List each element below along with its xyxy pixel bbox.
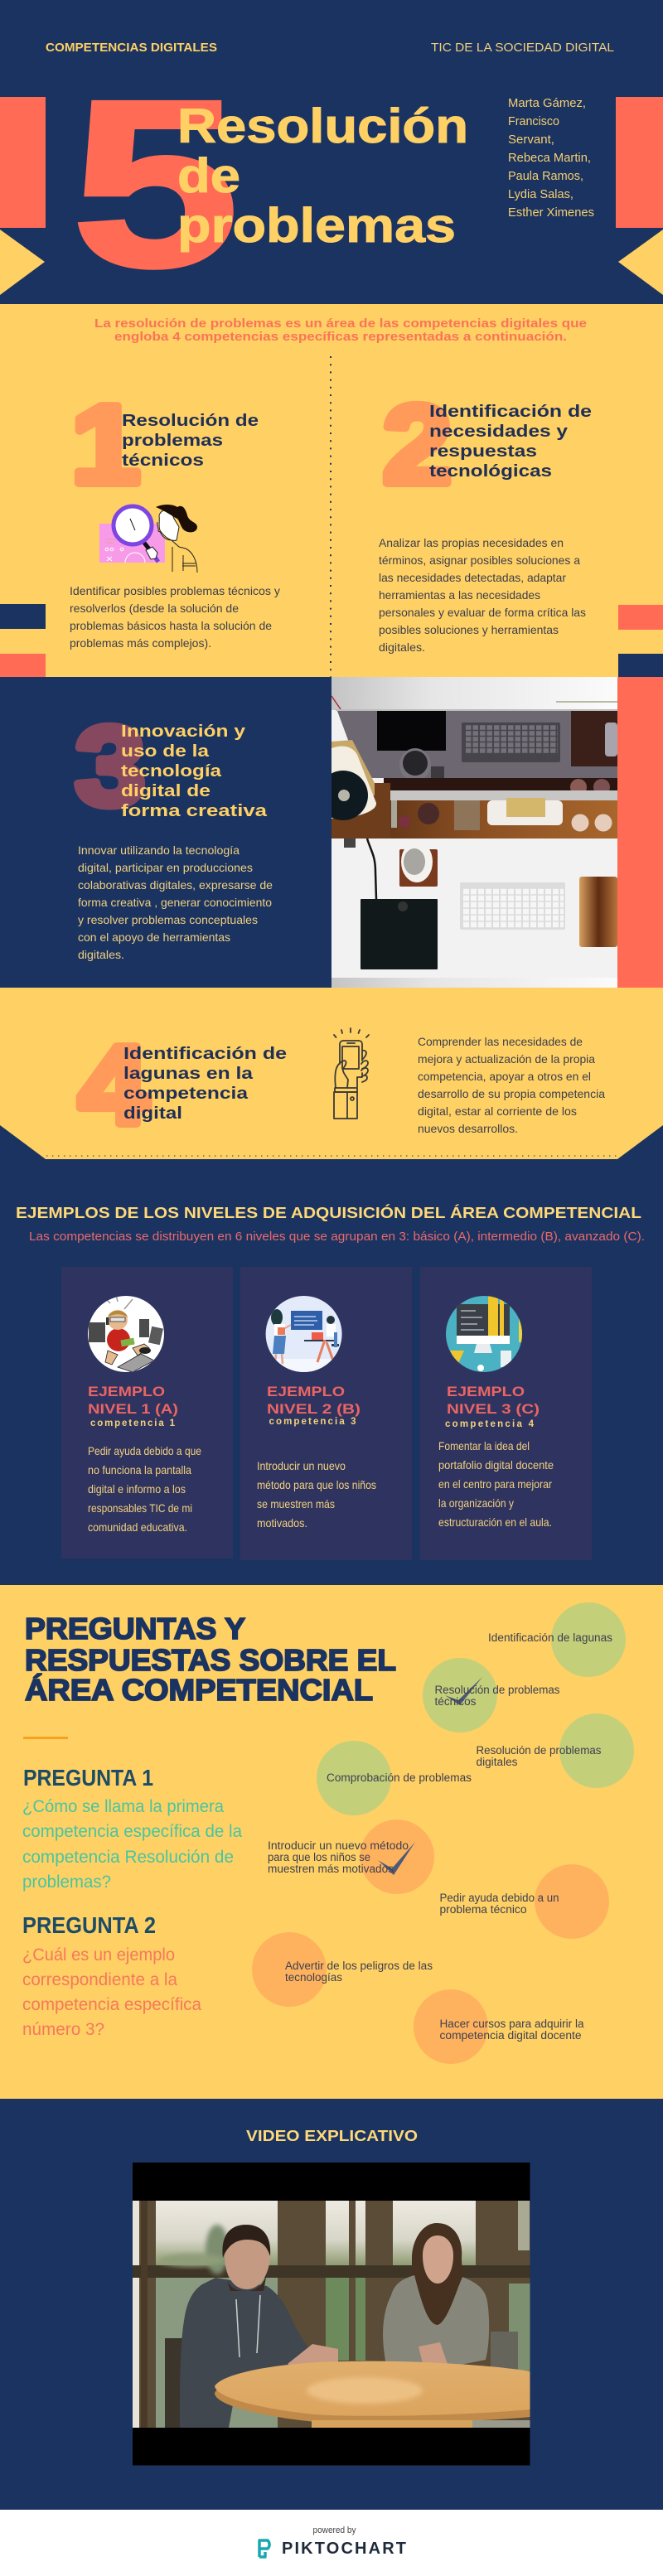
image: digital portfolio bbox=[446, 1296, 523, 1372]
description 3: y resolver problemas conceptuales bbox=[78, 913, 258, 926]
description 1: Identificar posibles problemas técnicos y bbox=[70, 584, 280, 597]
left coral block bbox=[0, 97, 46, 228]
description 2: personales y evaluar de forma crítica las bbox=[379, 606, 586, 619]
orange accent line bbox=[23, 1737, 68, 1739]
question 2 text: ¿Cuál es un ejemplo bbox=[22, 1945, 175, 1965]
authors: Rebeca Martin, bbox=[508, 151, 591, 165]
panel background bbox=[0, 1585, 663, 2099]
levels subtitle: Las competencias se distribuyen en 6 niveles que se agrupan en 3: básico (A), intermedio (B), avanzado (C). bbox=[29, 1230, 645, 1244]
question 1 text: competencia Resolución de bbox=[22, 1848, 234, 1867]
heading 2: tecnológicas bbox=[429, 462, 552, 481]
question 1 text: problemas? bbox=[22, 1873, 111, 1892]
logo wordmark: PIKTOCHART bbox=[282, 2540, 406, 2558]
questions panel bbox=[0, 1585, 663, 2099]
video frame bbox=[133, 2163, 530, 2466]
heading 2: necesidades y bbox=[429, 422, 569, 441]
yellow section background bbox=[0, 304, 663, 677]
description 4: mejora y actualización de la propia bbox=[418, 1052, 595, 1066]
powered by: powered by bbox=[313, 2525, 356, 2535]
answer: cursos bbox=[439, 2018, 584, 2042]
description 4: nuevos desarrollos. bbox=[418, 1122, 518, 1135]
answer: pedir ayuda: problema técnico bbox=[439, 1903, 527, 1916]
description 1 bbox=[70, 584, 280, 650]
question 1 text: competencia específica de la bbox=[22, 1822, 242, 1841]
header right label: TIC DE LA SOCIEDAD DIGITAL bbox=[431, 41, 614, 55]
left yellow arrow bbox=[0, 230, 45, 295]
questions heading: ÁREA COMPETENCIAL bbox=[25, 1673, 373, 1707]
answer: nuevo método: para que los niños se bbox=[268, 1851, 370, 1863]
intro text bbox=[94, 317, 587, 344]
description 2: las necesidades detectadas, adaptar bbox=[379, 571, 566, 584]
heading 3: tecnología bbox=[121, 761, 222, 781]
icon: hand holding phone bbox=[334, 1028, 369, 1119]
number 3: 3 bbox=[75, 703, 145, 829]
question 1 text bbox=[22, 1797, 242, 1892]
question 2 text: número 3? bbox=[22, 2020, 104, 2039]
card text bbox=[88, 1444, 201, 1534]
piktochart logo bbox=[259, 2540, 406, 2558]
answer: problemas digitales: digitales bbox=[476, 1756, 518, 1768]
description 2: herramientas a las necesidades bbox=[379, 588, 540, 602]
footer bbox=[0, 2510, 663, 2576]
description 3: digital, participar en producciones bbox=[78, 861, 253, 874]
check mark 2 bbox=[378, 1842, 415, 1875]
card text: no funciona la pantalla bbox=[88, 1463, 191, 1476]
heading 4: competencia bbox=[123, 1084, 249, 1103]
check mark 1 bbox=[445, 1677, 482, 1705]
authors bbox=[508, 96, 594, 220]
competence 3 panel bbox=[0, 677, 332, 988]
competence 4 panel bbox=[0, 988, 663, 1159]
question 1 text: ¿Cómo se llama la primera bbox=[22, 1797, 224, 1816]
heading 1: Resolución de bbox=[122, 411, 259, 430]
levels heading: EJEMPLOS DE LOS NIVELES DE ADQUISICIÓN DEL ÁREA COMPETENCIAL bbox=[16, 1204, 641, 1221]
description 4 bbox=[418, 1035, 605, 1135]
right coral block bbox=[616, 97, 663, 228]
answer: pedir ayuda: Pedir ayuda debido a un bbox=[439, 1892, 559, 1904]
card text: motivados. bbox=[257, 1516, 307, 1530]
heading 3: uso de la bbox=[121, 742, 210, 761]
card text bbox=[257, 1459, 376, 1530]
logo icon bbox=[259, 2540, 269, 2557]
questions heading: RESPUESTAS SOBRE EL bbox=[25, 1643, 396, 1677]
description 3: con el apoyo de herramientas bbox=[78, 930, 230, 944]
description 2: posibles soluciones y herramientas bbox=[379, 623, 559, 636]
icon: woman with magnifier bbox=[99, 505, 197, 573]
card text: responsables TIC de mi bbox=[88, 1501, 192, 1515]
heading 2 bbox=[429, 402, 592, 481]
right yellow arrow bbox=[618, 230, 663, 295]
card background bbox=[240, 1267, 412, 1560]
answer: cursos: competencia digital docente bbox=[439, 2029, 582, 2042]
side blocks right bbox=[618, 605, 663, 677]
description 4: digital, estar al corriente de los bbox=[418, 1104, 577, 1118]
title: problemas bbox=[177, 199, 456, 253]
card title: EJEMPLO bbox=[447, 1385, 525, 1399]
description 4: Comprender las necesidades de bbox=[418, 1035, 583, 1048]
answer: problemas digitales: Resolución de problemas bbox=[476, 1744, 602, 1757]
heading 1 bbox=[122, 411, 259, 470]
authors: Esther Ximenes bbox=[508, 205, 594, 220]
answer: problemas digitales bbox=[476, 1744, 602, 1768]
number 4: 4 bbox=[79, 1022, 148, 1148]
answer: comprobación: Comprobación de problemas bbox=[327, 1771, 472, 1784]
panel background bbox=[0, 677, 332, 988]
answers to question 1 bbox=[317, 1602, 634, 1815]
header left label: COMPETENCIAS DIGITALES bbox=[46, 41, 217, 55]
question 2 label: PREGUNTA 2 bbox=[22, 1912, 156, 1938]
answer: nuevo método: Introducir un nuevo método bbox=[268, 1839, 409, 1852]
question 2 text bbox=[22, 1945, 201, 2039]
card title: EJEMPLO bbox=[267, 1385, 345, 1399]
questions heading bbox=[25, 1612, 396, 1707]
description 1: resolverlos (desde la solución de bbox=[70, 602, 239, 615]
video still bbox=[133, 2201, 530, 2428]
card: nivel 2 bbox=[240, 1267, 412, 1560]
heading 1: problemas bbox=[122, 431, 223, 450]
question 2 text: correspondiente a la bbox=[22, 1970, 177, 1989]
card text: portafolio digital docente bbox=[438, 1458, 554, 1472]
answer: lagunas: Identificación de lagunas bbox=[488, 1631, 612, 1644]
description 3: forma creativa , generar conocimiento bbox=[78, 896, 272, 909]
answer: pedir ayuda bbox=[439, 1892, 559, 1916]
video heading: VIDEO EXPLICATIVO bbox=[246, 2128, 418, 2144]
title bbox=[177, 99, 468, 253]
heading 3: forma creativa bbox=[121, 801, 268, 820]
image: teacher and student bbox=[265, 1296, 342, 1372]
description 4: desarrollo de su propia competencia bbox=[418, 1087, 605, 1100]
card title bbox=[267, 1385, 361, 1417]
heading 2: Identificación de bbox=[429, 402, 592, 421]
answer: advertir: tecnologías bbox=[285, 1971, 342, 1984]
description 4: competencia, apoyar a otros en el bbox=[418, 1070, 591, 1083]
card text: se muestren más bbox=[257, 1497, 335, 1510]
card text bbox=[438, 1439, 554, 1529]
intro text: engloba 4 competencias específicas representadas a continuación. bbox=[114, 331, 567, 344]
card text: Fomentar la idea del bbox=[438, 1439, 530, 1452]
title: de bbox=[177, 149, 240, 203]
answer: problemas técnicos: técnicos bbox=[434, 1695, 477, 1708]
card text: en el centro para mejorar bbox=[438, 1477, 552, 1491]
card title: EJEMPLO bbox=[88, 1385, 165, 1399]
question 2 text: competencia específica bbox=[22, 1995, 201, 2014]
card background bbox=[61, 1267, 233, 1559]
card text: Pedir ayuda debido a que bbox=[88, 1444, 201, 1457]
competence label: competencia 3 bbox=[269, 1417, 356, 1427]
competence label: competencia 1 bbox=[90, 1418, 176, 1428]
intro text: La resolución de problemas es un área de las competencias digitales que bbox=[94, 317, 587, 331]
card: nivel 3 bbox=[420, 1267, 592, 1560]
answer: advertir: Advertir de los peligros de las bbox=[285, 1960, 433, 1972]
side blocks left bbox=[0, 604, 46, 677]
competence 1 bbox=[70, 382, 280, 650]
card: nivel 1 bbox=[61, 1267, 233, 1559]
answer: cursos: Hacer cursos para adquirir la bbox=[439, 2018, 584, 2030]
answer: problemas técnicos: Resolución de problemas bbox=[434, 1684, 560, 1696]
question 1 label: PREGUNTA 1 bbox=[23, 1765, 153, 1791]
heading 1: técnicos bbox=[122, 451, 204, 470]
heading 3: Innovación y bbox=[121, 722, 246, 741]
description 3 bbox=[78, 843, 273, 961]
bottom dotted line bbox=[46, 1155, 617, 1157]
panel background bbox=[0, 988, 663, 1159]
description 1: problemas básicos hasta la solución de bbox=[70, 619, 272, 632]
answer: nuevo método bbox=[268, 1839, 409, 1875]
footer background bbox=[0, 2510, 663, 2576]
card title: NIVEL 3 (C) bbox=[447, 1402, 540, 1417]
answer: problemas técnicos bbox=[434, 1684, 560, 1708]
heading 4 bbox=[123, 1044, 287, 1123]
description 2: Analizar las propias necesidades en bbox=[379, 536, 564, 549]
card text: digital e informo a los bbox=[88, 1482, 186, 1496]
heading 4: lagunas en la bbox=[123, 1064, 254, 1083]
desk photo bbox=[318, 677, 617, 988]
heading 3 bbox=[121, 722, 268, 820]
authors: Lydia Salas, bbox=[508, 187, 573, 201]
vertical dotted divider bbox=[330, 356, 332, 677]
authors: Francisco bbox=[508, 114, 559, 128]
card title bbox=[447, 1385, 540, 1417]
card text: método para que los niños bbox=[257, 1478, 376, 1491]
description 3: digitales. bbox=[78, 948, 124, 961]
description 1: problemas más complejos). bbox=[70, 636, 211, 650]
card text: la organización y bbox=[438, 1496, 514, 1510]
description 2 bbox=[379, 536, 586, 654]
image: overwhelmed user bbox=[88, 1294, 164, 1372]
competence label: competencia 4 bbox=[445, 1419, 535, 1429]
right coral band bbox=[617, 677, 663, 988]
description 2: términos, asignar posibles soluciones a bbox=[379, 553, 580, 567]
heading 2: respuestas bbox=[429, 442, 537, 461]
heading 4: digital bbox=[123, 1104, 182, 1123]
heading 3: digital de bbox=[121, 781, 211, 800]
title: Resolución bbox=[177, 99, 468, 153]
description 2: digitales. bbox=[379, 640, 425, 654]
authors: Servant, bbox=[508, 133, 554, 147]
competence 2 bbox=[379, 382, 592, 654]
description 3: Innovar utilizando la tecnología bbox=[78, 843, 240, 857]
video black background bbox=[133, 2163, 530, 2466]
big number 5: 5 bbox=[72, 52, 239, 316]
number 2: 2 bbox=[383, 382, 452, 507]
answer: nuevo método: muestren más motivados bbox=[268, 1863, 394, 1875]
number 1: 1 bbox=[71, 382, 140, 507]
answer: advertir bbox=[285, 1960, 433, 1984]
card background bbox=[420, 1267, 592, 1560]
card title: NIVEL 1 (A) bbox=[88, 1402, 178, 1417]
card text: estructuración en el aula. bbox=[438, 1515, 552, 1529]
heading 4: Identificación de bbox=[123, 1044, 287, 1063]
authors: Paula Ramos, bbox=[508, 169, 583, 183]
header section bbox=[0, 41, 663, 316]
answers to question 2 bbox=[252, 1820, 609, 2064]
questions heading: PREGUNTAS Y bbox=[25, 1612, 245, 1646]
authors: Marta Gámez, bbox=[508, 96, 586, 110]
description 3: colaborativas digitales, expresarse de bbox=[78, 878, 273, 892]
card title bbox=[88, 1385, 178, 1417]
card text: Introducir un nuevo bbox=[257, 1459, 346, 1472]
card title: NIVEL 2 (B) bbox=[267, 1402, 361, 1417]
card text: comunidad educativa. bbox=[88, 1520, 187, 1534]
